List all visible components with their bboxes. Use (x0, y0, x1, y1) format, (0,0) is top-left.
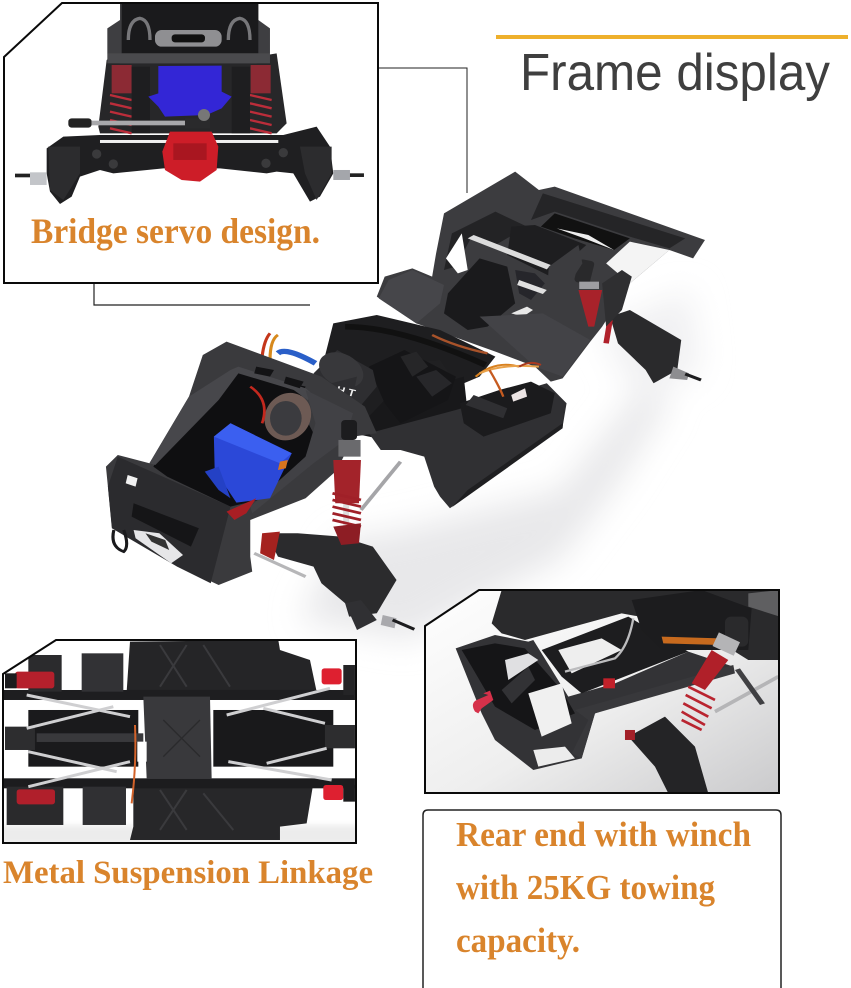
blue servo (148, 66, 232, 117)
rear frame (377, 172, 705, 382)
rods (715, 677, 778, 712)
lower axle (628, 717, 708, 793)
title: frame display: Frame display (520, 44, 830, 102)
front axle (254, 532, 414, 630)
caption: bridge servo design: Bridge servo design. (31, 211, 320, 251)
rear drive rod (361, 462, 401, 510)
top body (492, 589, 780, 660)
panel: bridge servo design (0, 0, 380, 285)
text box: rear end with winch (423, 810, 781, 988)
transmission (369, 350, 456, 423)
esc wires (476, 363, 541, 397)
rear axle (606, 310, 701, 383)
motor can (311, 345, 377, 410)
front motor (250, 387, 317, 445)
shocks (112, 65, 132, 93)
axle (47, 127, 333, 204)
front bumper (108, 457, 256, 583)
rear rack (456, 635, 733, 770)
red part (603, 678, 615, 688)
drive shafts and middle (28, 710, 138, 767)
links (132, 67, 150, 133)
ground shadow (300, 290, 700, 640)
connector line: top panel to rear frame (378, 68, 467, 193)
blue steering servo (205, 423, 292, 503)
middle frame rail (321, 315, 495, 440)
panel: rear end with winch (420, 585, 785, 797)
connector line: top panel lower (94, 283, 310, 305)
shock (682, 617, 748, 730)
stub axles (15, 174, 30, 177)
shock front (332, 420, 361, 545)
caption: metal suspension linkage: Metal Suspension Linkage (3, 855, 373, 891)
orange wires (132, 725, 135, 803)
motor can: H T (335, 385, 357, 400)
wires blue and orange (262, 333, 315, 363)
caption line 1: Rear end with winch (456, 815, 751, 854)
red hook (473, 691, 493, 713)
red shocks (15, 672, 54, 688)
panel: metal suspension linkage (0, 636, 360, 846)
central tub top and bottom (127, 640, 317, 692)
front bumper (107, 4, 270, 54)
steering link (68, 118, 92, 128)
rear fender (98, 53, 287, 133)
front frame (106, 342, 377, 585)
central skid (143, 697, 212, 778)
rear shock (574, 259, 602, 327)
caption line 3: capacity. (456, 921, 580, 960)
lower chassis plate (369, 382, 567, 508)
main chassis illustration (106, 172, 705, 640)
servo (632, 590, 752, 650)
red differential (162, 132, 218, 182)
links (27, 688, 332, 787)
caption line 2: with 25KG towing (456, 868, 715, 907)
white gaps (3, 702, 23, 725)
side frame (3, 690, 355, 700)
